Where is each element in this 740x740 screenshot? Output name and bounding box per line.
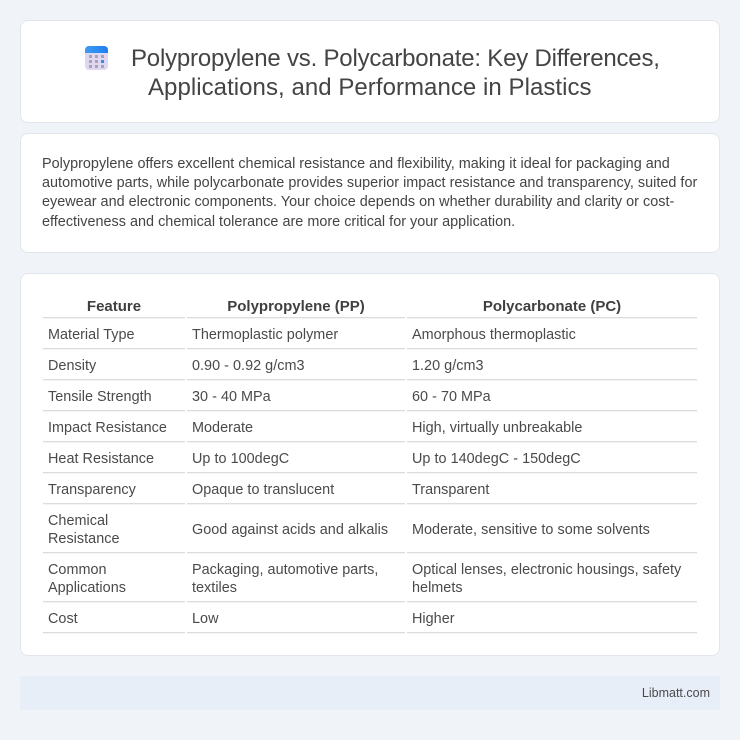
row: transparency: Transparency [48,482,136,498]
row: common applications: Common [48,562,107,578]
row: common applications [48,562,682,596]
summary text: Polypropylene offers excellent chemical resistance and flexibility, making it ideal for packaging and [42,156,670,172]
row: tensile strength: 30 - 40 MPa [192,389,271,405]
row: impact resistance: Moderate [192,420,253,436]
row: impact resistance [48,420,582,436]
summary text [42,156,698,230]
row: density [48,358,484,374]
table panel [20,273,720,656]
row: common applications: textiles [192,580,237,596]
row: common applications: Applications [48,580,126,596]
header row [87,298,621,315]
summary text: automotive parts, while polycarbonate provides superior impact resistance and transparency, suited for [42,175,697,191]
summary text: effectiveness and chemical tolerance are more critical for your application. [42,214,515,230]
title [131,45,660,101]
row: transparency [48,482,490,498]
header panel [20,20,720,123]
header row: Polycarbonate (PC) [483,298,621,315]
row: tensile strength: Tensile Strength [48,389,152,405]
row: chemical resistance: Resistance [48,531,120,547]
footer credit: Libmatt.com [642,686,710,700]
row: heat resistance: Up to 100degC [192,451,289,467]
row: cost: Higher [412,611,455,627]
header row: Polypropylene (PP) [227,298,365,315]
row: cost: Cost [48,611,78,627]
row: impact resistance: Impact Resistance [48,420,167,436]
row: chemical resistance: Moderate, sensitive to some solvents [412,522,650,538]
summary panel [20,133,720,253]
row: chemical resistance: Chemical [48,513,108,529]
row: cost [48,611,455,627]
row: tensile strength: 60 - 70 MPa [412,389,491,405]
row: material type [48,327,576,343]
row: density: Density [48,358,96,374]
row: common applications: Packaging, automotive parts, [192,562,378,578]
row: chemical resistance [48,513,650,547]
row: heat resistance: Up to 140degC - 150degC [412,451,581,467]
row: impact resistance: High, virtually unbreakable [412,420,582,436]
row: cost: Low [192,611,218,627]
row: transparency: Transparent [412,482,489,498]
row: heat resistance: Heat Resistance [48,451,154,467]
row: chemical resistance: Good against acids and alkalis [192,522,388,538]
header row: Feature [87,298,141,315]
row: common applications: Optical lenses, electronic housings, safety [412,562,681,578]
row: material type: Material Type [48,327,135,343]
row: common applications: helmets [412,580,463,596]
title: Polypropylene vs. Polycarbonate: Key Differences, [131,45,660,72]
row: material type: Amorphous thermoplastic [412,327,576,343]
title: Applications, and Performance in Plastics [148,74,592,101]
row: heat resistance [48,451,581,467]
footer bar [20,676,720,710]
summary text: eyewear and electronic components. Your choice depends on whether durability and clarity or cost- [42,194,674,210]
row: density: 1.20 g/cm3 [412,358,484,374]
row: density: 0.90 - 0.92 g/cm3 [192,358,305,374]
row: transparency: Opaque to translucent [192,482,334,498]
icon: calendar grid [85,46,108,70]
row: tensile strength [48,389,491,405]
row: material type: Thermoplastic polymer [192,327,338,343]
comparison table [43,298,697,634]
